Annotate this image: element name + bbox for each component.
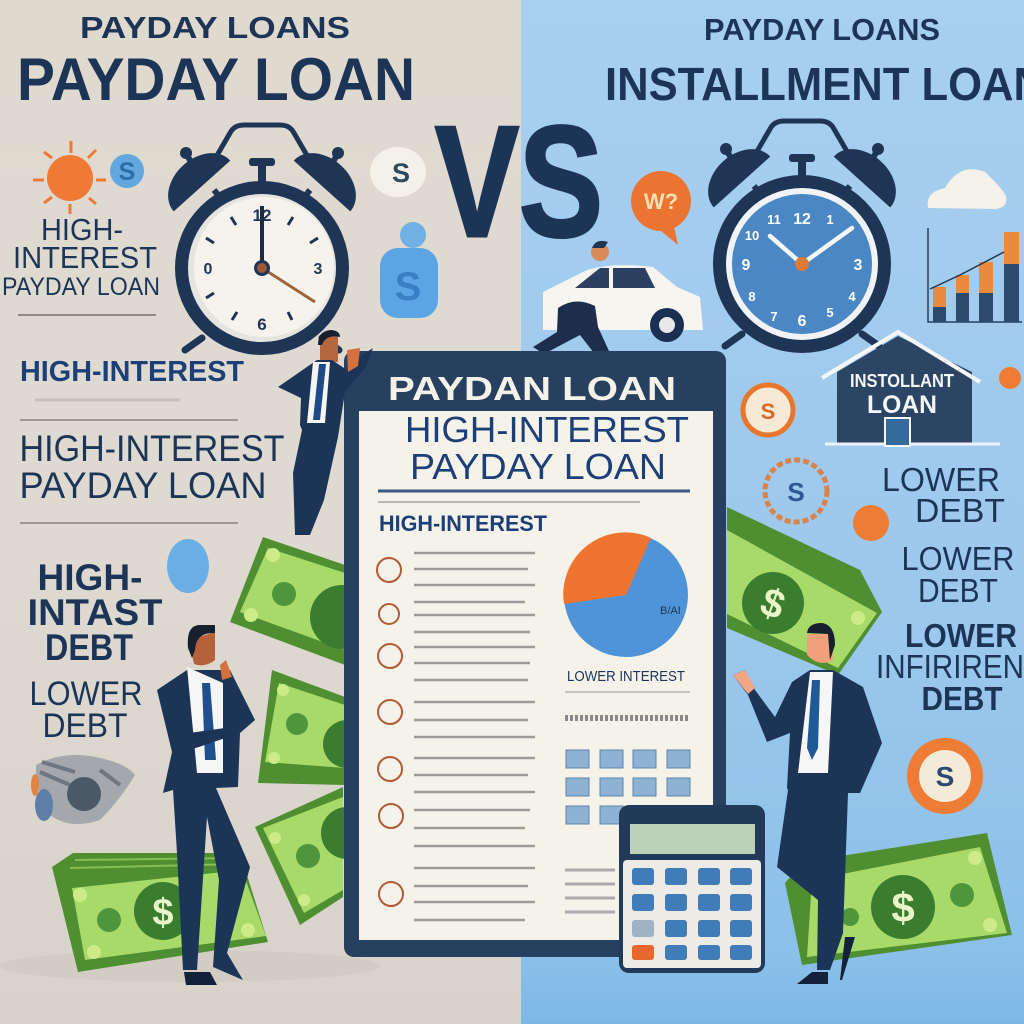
icon: money bag: S [395,265,421,309]
document subtitle [405,409,689,487]
document subtitle: HIGH-INTEREST [405,409,689,450]
icon: house: LOAN [867,391,937,419]
pie chart [563,532,688,657]
left text block 4: DEBT [45,627,133,668]
right text blocks: DEBT [918,572,998,609]
right cash stacks [727,507,1012,965]
left cash stacks [52,537,374,972]
right clock: 3 [854,257,863,274]
right text blocks: LOWER [902,540,1014,577]
floor shadow left [0,950,380,982]
person: top left businessman [278,330,373,535]
left heading: PAYDAY LOANS [80,10,350,45]
icon: house [822,332,1000,446]
keypad table [566,750,690,824]
left text block 4 [28,557,163,668]
document label: HIGH-INTEREST [379,511,548,536]
right clock: 6 [798,313,807,330]
left text block 3 [20,428,284,506]
icon: speech bubble: W? [644,189,678,214]
right clock: 11 [767,212,781,227]
document title: PAYDAN LOAN [388,370,676,407]
right clock: 1 [826,212,834,227]
right clock: 10 [745,228,759,243]
right cash stacks: $ [891,884,915,931]
icon: coins: S [936,761,954,792]
icon: coins: S [787,477,805,507]
right text blocks: DEBT [915,492,1005,529]
panel: right background [521,0,1024,1024]
icon: blue bag [167,539,209,593]
icon: car with person [533,241,703,366]
right heading: PAYDAY LOANS [704,12,940,47]
left text block 4: HIGH- [38,557,142,598]
icon: sun: S [119,158,135,186]
checklist [377,553,535,920]
icon: coins [743,367,1021,814]
pie caption: LOWER INTEREST [567,668,685,685]
icon: speech bubble [631,171,691,245]
icon: coin bubble: S [392,158,410,188]
icon: cloud [928,169,1006,209]
icon: scrap metal [31,755,135,824]
left text block 5: DEBT [42,707,128,745]
icon: left alarm clock: 0 [204,261,213,278]
left text block 1: HIGH- [41,212,123,247]
icon: house: INSTOLLANT [850,371,954,391]
icon: coins: S [761,399,775,424]
panel: central document [344,351,726,957]
right clock: 8 [748,289,756,304]
left text block 1 [2,212,160,301]
left text block 5: LOWER [30,675,142,713]
right text blocks: LOWER [882,461,1000,498]
left text block 5 [30,675,142,745]
right clock: 9 [742,257,751,274]
document subtitle: PAYDAY LOAN [410,446,666,487]
left text block 1: INTEREST [13,240,157,275]
VS heading: VS [435,94,603,270]
left heading: PAYDAY LOAN [17,46,415,113]
right text blocks: DEBT [922,680,1002,717]
right clock [695,121,909,353]
right clock: 7 [770,309,778,324]
left text block 3: HIGH-INTEREST [20,428,284,469]
right heading [605,12,1024,110]
pie chart: B/AI [660,605,681,617]
right clock: 12 [793,211,811,228]
icon: coin bubble [370,147,426,197]
icon: calculator [619,805,765,973]
icon: sun [33,141,144,214]
left text block 3: PAYDAY LOAN [20,465,266,506]
bar chart [928,228,1022,322]
icon: left alarm clock: 6 [257,315,267,334]
right text blocks [876,461,1024,717]
panel: left background [0,0,521,1024]
left text block 2: HIGH-INTEREST [20,356,244,388]
person: lower left businessman [157,625,255,985]
icon: left alarm clock: 12 [253,206,271,225]
left text block 4: INTAST [28,592,163,633]
icon: money bag [380,222,438,318]
left text block 1: PAYDAY LOAN [2,273,160,301]
right clock: 4 [848,289,856,304]
person: right businessman [733,623,882,984]
right clock: 5 [826,305,834,320]
left cash stacks: $ [152,892,174,934]
icon: left alarm clock: 3 [314,261,323,278]
left heading [17,10,415,113]
icon: left alarm clock [155,125,369,355]
right cash stacks: $ [755,579,791,628]
